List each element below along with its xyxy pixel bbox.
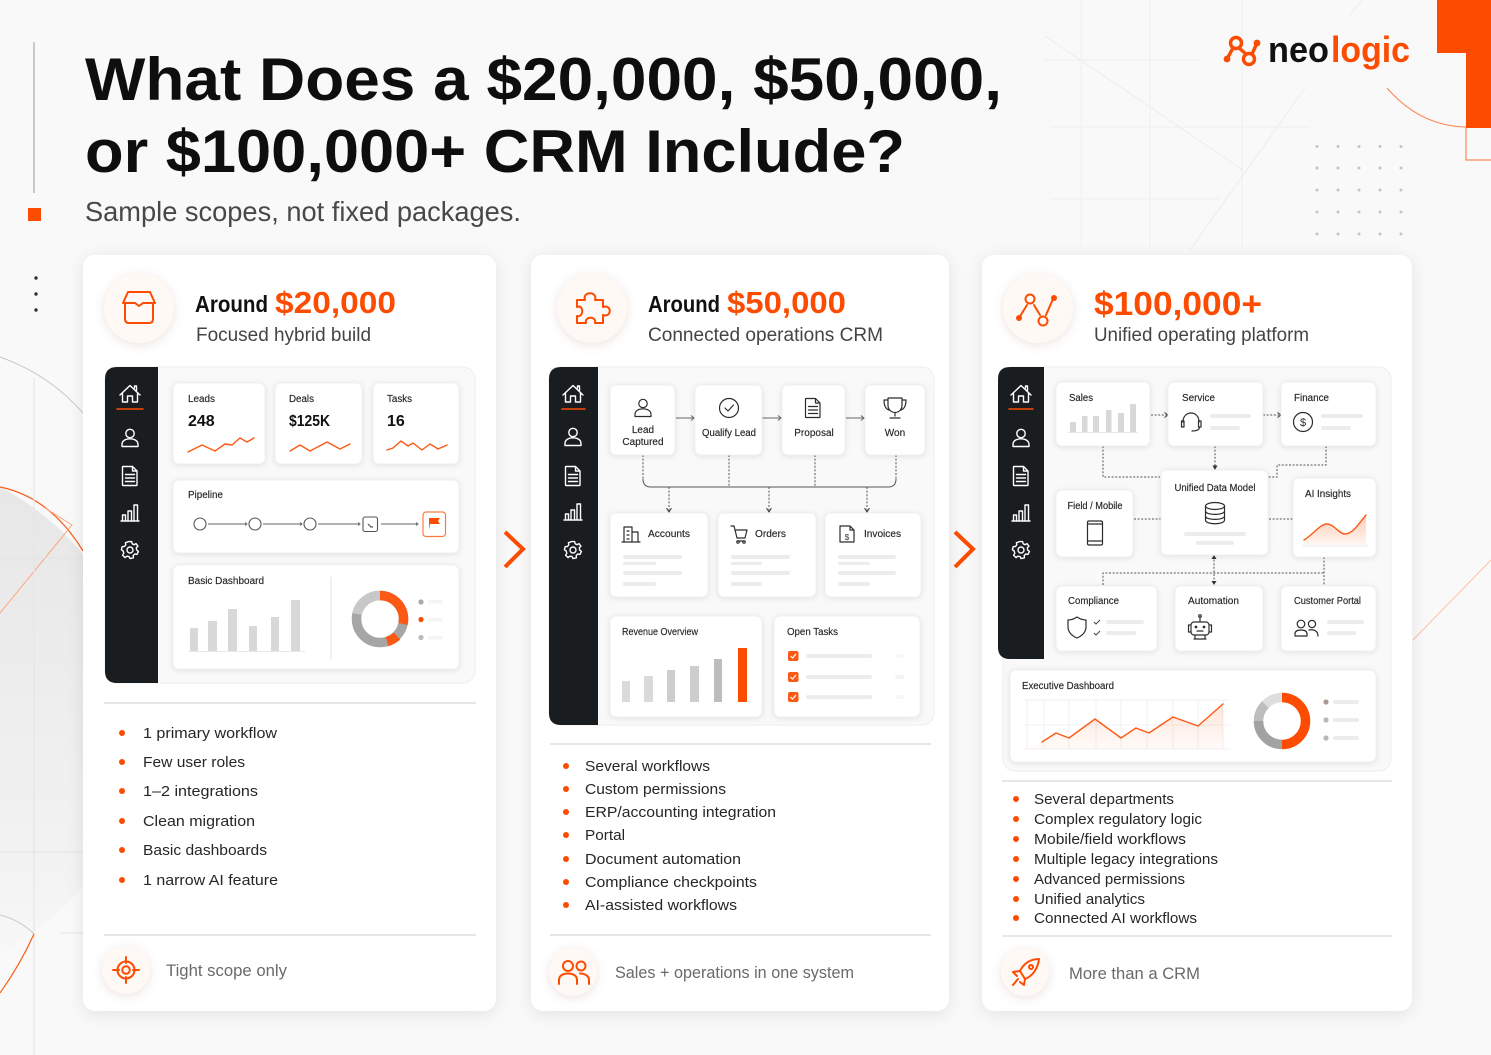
footer: tight scope only: Tight scope only (166, 962, 288, 980)
feature list (1013, 791, 1218, 927)
feature list: Mobile/field workflows (1034, 831, 1186, 848)
stat card: tasks: 16 (387, 413, 405, 430)
heading: around $20,000: Around (195, 291, 268, 317)
feature list: 1 primary workflow (143, 725, 277, 742)
feature list: AI-assisted workflows (585, 897, 737, 914)
sidebar icons (562, 386, 585, 559)
chart card: executive dashboard (1010, 670, 1376, 762)
feature list: ERP/accounting integration (585, 804, 776, 821)
feature list: 1–2 integrations (143, 783, 258, 800)
pipeline card: Pipeline (188, 490, 223, 501)
step: lead captured: Lead (632, 425, 654, 436)
feature list: Document automation (585, 851, 741, 868)
icon: network (1003, 273, 1073, 343)
footer: sales + operations in one system (549, 948, 854, 996)
flow connectors (643, 416, 896, 512)
feature list: Multiple legacy integrations (1034, 851, 1218, 868)
module: field / mobile (1056, 490, 1133, 557)
module: unified data model (1161, 470, 1268, 555)
step: lead captured: Captured (622, 437, 664, 448)
heading: around $20,000 (195, 285, 396, 320)
panel: around $20,000 (83, 255, 496, 1011)
subheading: Connected operations CRM (648, 325, 883, 346)
step: proposal (782, 385, 845, 455)
background decoration: top-right grid and dots (1043, 0, 1491, 640)
feature list: Basic dashboards (143, 842, 267, 859)
donut chart (1258, 698, 1305, 744)
module: sales (1056, 382, 1150, 446)
module: orders (718, 513, 816, 597)
left accent rule and marker (28, 42, 41, 312)
feature list: Compliance checkpoints (585, 874, 757, 891)
heading: $100,000+: $100,000+ (1094, 285, 1262, 322)
feature list: Portal (585, 827, 625, 844)
module: service: Service (1182, 393, 1215, 404)
step: qualify lead (695, 385, 762, 455)
dashed connectors (1103, 412, 1326, 585)
title (85, 46, 1002, 185)
stat card: deals: $125K (289, 413, 330, 430)
stat card: deals (275, 383, 362, 464)
module: finance (1281, 382, 1376, 446)
bar chart (622, 648, 747, 702)
feature list: Complex regulatory logic (1034, 811, 1203, 828)
module: accounts (610, 513, 708, 597)
subheading: Focused hybrid build (196, 325, 371, 346)
module: sales: Sales (1069, 393, 1093, 404)
dashboard mockup: basic CRM (105, 367, 475, 683)
module: unified data model: Unified Data Model (1174, 483, 1256, 494)
donut chart (356, 595, 404, 642)
dashboard mockup: unified platform (998, 367, 1391, 771)
chart card: executive dashboard: Executive Dashboard (1022, 681, 1114, 692)
panel: $100,000+ (982, 255, 1412, 1011)
logo: neologic: logic (1331, 29, 1410, 70)
stat card: deals: Deals (289, 394, 314, 405)
pipeline card (173, 480, 459, 553)
step: won (865, 385, 925, 455)
heading: around $50,000: $50,000 (727, 285, 846, 320)
stat card: leads: 248 (188, 413, 215, 430)
module: service (1168, 382, 1263, 446)
step: proposal: Proposal (794, 428, 834, 439)
module: finance: Finance (1294, 393, 1329, 404)
feature list: Several departments (1034, 791, 1174, 808)
module: automation: Automation (1188, 596, 1239, 607)
line chart (1023, 700, 1230, 749)
module: invoices: Invoices (864, 529, 901, 540)
feature list: Advanced permissions (1034, 871, 1185, 888)
step: lead captured (610, 385, 675, 455)
module: AI insights: AI Insights (1305, 489, 1351, 500)
donut legend (1323, 699, 1359, 741)
icon: box (104, 273, 174, 343)
feature list: 1 narrow AI feature (143, 872, 278, 889)
chart card: revenue overview: Revenue Overview (622, 627, 699, 638)
module: automation (1175, 586, 1263, 651)
heading: around $50,000: Around (648, 291, 720, 317)
module: finance: $ (1300, 417, 1306, 429)
module: orders: Orders (755, 529, 786, 540)
feature list: Connected AI workflows (1034, 910, 1197, 927)
heading: around $50,000 (648, 285, 846, 320)
stat card: leads: Leads (188, 394, 215, 405)
module: invoices: $ (845, 533, 850, 542)
footer: tight scope only (102, 946, 288, 994)
heading: around $20,000: $20,000 (275, 285, 396, 320)
title: or $100,000+ CRM Include? (85, 118, 905, 185)
feature list (563, 758, 776, 914)
task list: open tasks: Open Tasks (787, 627, 838, 638)
chart card: revenue overview (610, 616, 762, 717)
module: customer portal (1281, 586, 1376, 651)
logo: neologic: neo (1268, 29, 1329, 70)
module: invoices (825, 513, 921, 597)
icon: puzzle (557, 273, 627, 343)
feature list: Few user roles (143, 754, 245, 771)
title: What Does a $20,000, $50,000, (85, 46, 1002, 113)
background decoration: left shapes (0, 357, 142, 1055)
module: compliance (1056, 586, 1157, 651)
arrow: first to second (505, 532, 523, 567)
bar chart (188, 600, 305, 652)
feature list: Several workflows (585, 758, 710, 775)
corner accent shape (1387, 0, 1491, 160)
arrow: second to third (955, 532, 973, 567)
feature list (119, 725, 278, 889)
chart card: basic dashboard: Basic Dashboard (188, 576, 264, 587)
stat card: tasks (373, 383, 459, 464)
sidebar icons (117, 386, 143, 559)
module: AI insights (1293, 478, 1376, 557)
donut legend (418, 599, 442, 640)
feature list: Clean migration (143, 813, 255, 830)
chart card: basic dashboard (173, 565, 459, 669)
module: field / mobile: Field / Mobile (1068, 501, 1123, 512)
step: qualify lead: Qualify Lead (702, 428, 756, 439)
subheading: Unified operating platform (1094, 325, 1309, 346)
module: compliance: Compliance (1068, 596, 1119, 607)
feature list: Custom permissions (585, 781, 726, 798)
footer: more than a CRM: More than a CRM (1069, 965, 1200, 983)
dashboard mockup: connected CRM (549, 367, 934, 725)
task list: open tasks (774, 616, 920, 717)
panel: around $50,000 (531, 255, 949, 1011)
sidebar icons (1009, 386, 1033, 559)
module: accounts: Accounts (648, 529, 690, 540)
step: won: Won (885, 428, 905, 439)
feature list: Unified analytics (1034, 891, 1145, 908)
module: customer portal: Customer Portal (1294, 596, 1361, 607)
logo: neologic (1224, 29, 1410, 70)
stat card: leads (173, 383, 265, 464)
footer: sales + operations in one system: Sales + operations in one system (615, 964, 854, 982)
stat card: tasks: Tasks (387, 394, 412, 405)
subtitle: Sample scopes, not fixed packages. (85, 196, 521, 227)
footer: more than a CRM (1001, 948, 1200, 996)
